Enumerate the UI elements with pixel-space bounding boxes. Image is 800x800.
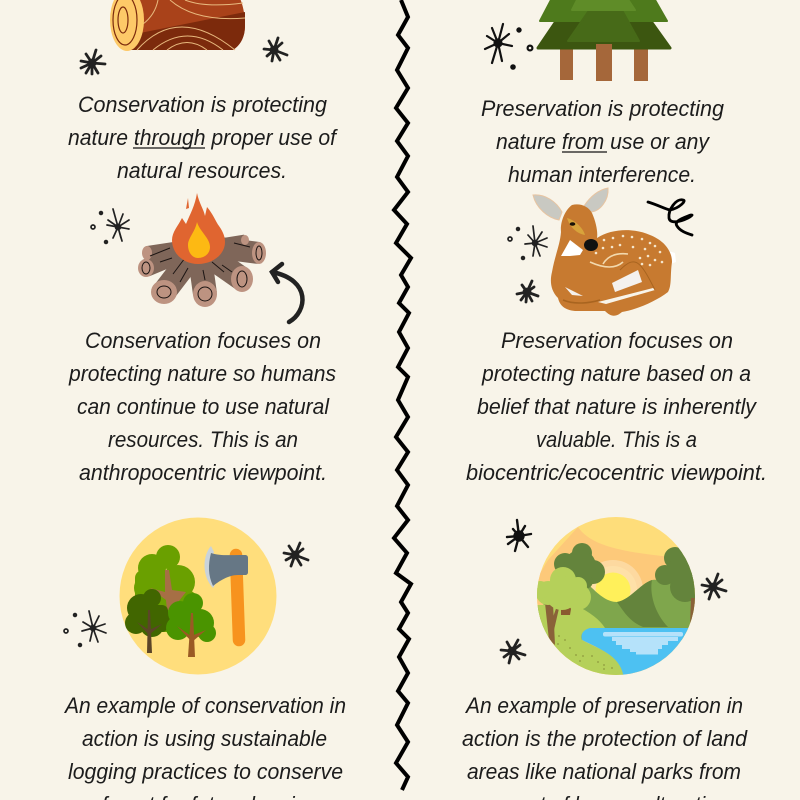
- icon: landscape circle: [537, 517, 695, 675]
- text: preservation focus: valuable. This is a: [536, 427, 697, 452]
- icon: pine trees: [538, 0, 670, 81]
- text: preservation focus: [466, 328, 767, 485]
- text: preservation example: An example of preservation in: [464, 693, 743, 718]
- arrow: [272, 264, 302, 322]
- text: conservation focus: Conservation focuses on: [85, 328, 321, 353]
- text: conservation example: logging practices to conserve: [68, 759, 343, 784]
- text: preservation example: areas like national parks from: [467, 759, 741, 784]
- icon: spark left of pine trees: [485, 24, 532, 69]
- text: preservation definition: Preservation is protecting: [481, 96, 725, 121]
- text: preservation focus: belief that nature is inherently: [477, 394, 758, 419]
- icon: axe and trees: [120, 518, 276, 674]
- icon: sparkle star near axe: [284, 543, 308, 566]
- icon: sparkle star left of log: [81, 50, 105, 74]
- text: conservation focus: [68, 328, 336, 485]
- text: conservation example: An example of conservation in: [63, 693, 346, 718]
- text: conservation definition: nature through proper use of: [68, 125, 339, 150]
- text: preservation definition: nature from use or any: [496, 129, 711, 154]
- icon: log: [110, 0, 245, 51]
- text: preservation definition: [481, 96, 725, 187]
- text: conservation definition: Conservation is protecting: [78, 92, 328, 117]
- text: conservation focus: anthropocentric viewpoint.: [79, 460, 327, 485]
- text: conservation example: [63, 693, 346, 800]
- text: conservation definition: [68, 92, 339, 183]
- text: preservation definition: human interference.: [508, 162, 696, 187]
- icon: campfire: [138, 193, 266, 307]
- text: conservation definition: natural resources.: [117, 158, 287, 183]
- icon: spark top left of landscape: [507, 520, 531, 551]
- text: conservation example: action is using sustainable: [82, 726, 327, 751]
- icon: spark left of deer: [508, 226, 547, 259]
- icon: sparkle star lower left of landscape: [501, 640, 525, 663]
- text: conservation focus: can continue to use natural: [77, 394, 330, 419]
- icon: squiggle: [648, 200, 692, 235]
- text: preservation focus: protecting nature based on a: [481, 361, 751, 386]
- text: preservation example: [462, 693, 748, 800]
- icon: spark left of campfire: [91, 209, 129, 243]
- text: conservation focus: resources. This is an: [108, 427, 298, 452]
- text: preservation focus: biocentric/ecocentric viewpoint.: [466, 460, 767, 485]
- text: conservation focus: protecting nature so humans: [68, 361, 336, 386]
- icon: deer: [533, 188, 676, 316]
- icon: sparkle star below deer spark: [517, 281, 538, 302]
- zigzag divider: [394, 0, 411, 790]
- text: preservation focus: Preservation focuses on: [501, 328, 733, 353]
- icon: sparkle star right of log: [264, 38, 287, 61]
- icon: sparkle star right of landscape: [702, 574, 726, 599]
- text: preservation example: action is the protection of land: [462, 726, 748, 751]
- icon: spark left of trees: [64, 611, 106, 646]
